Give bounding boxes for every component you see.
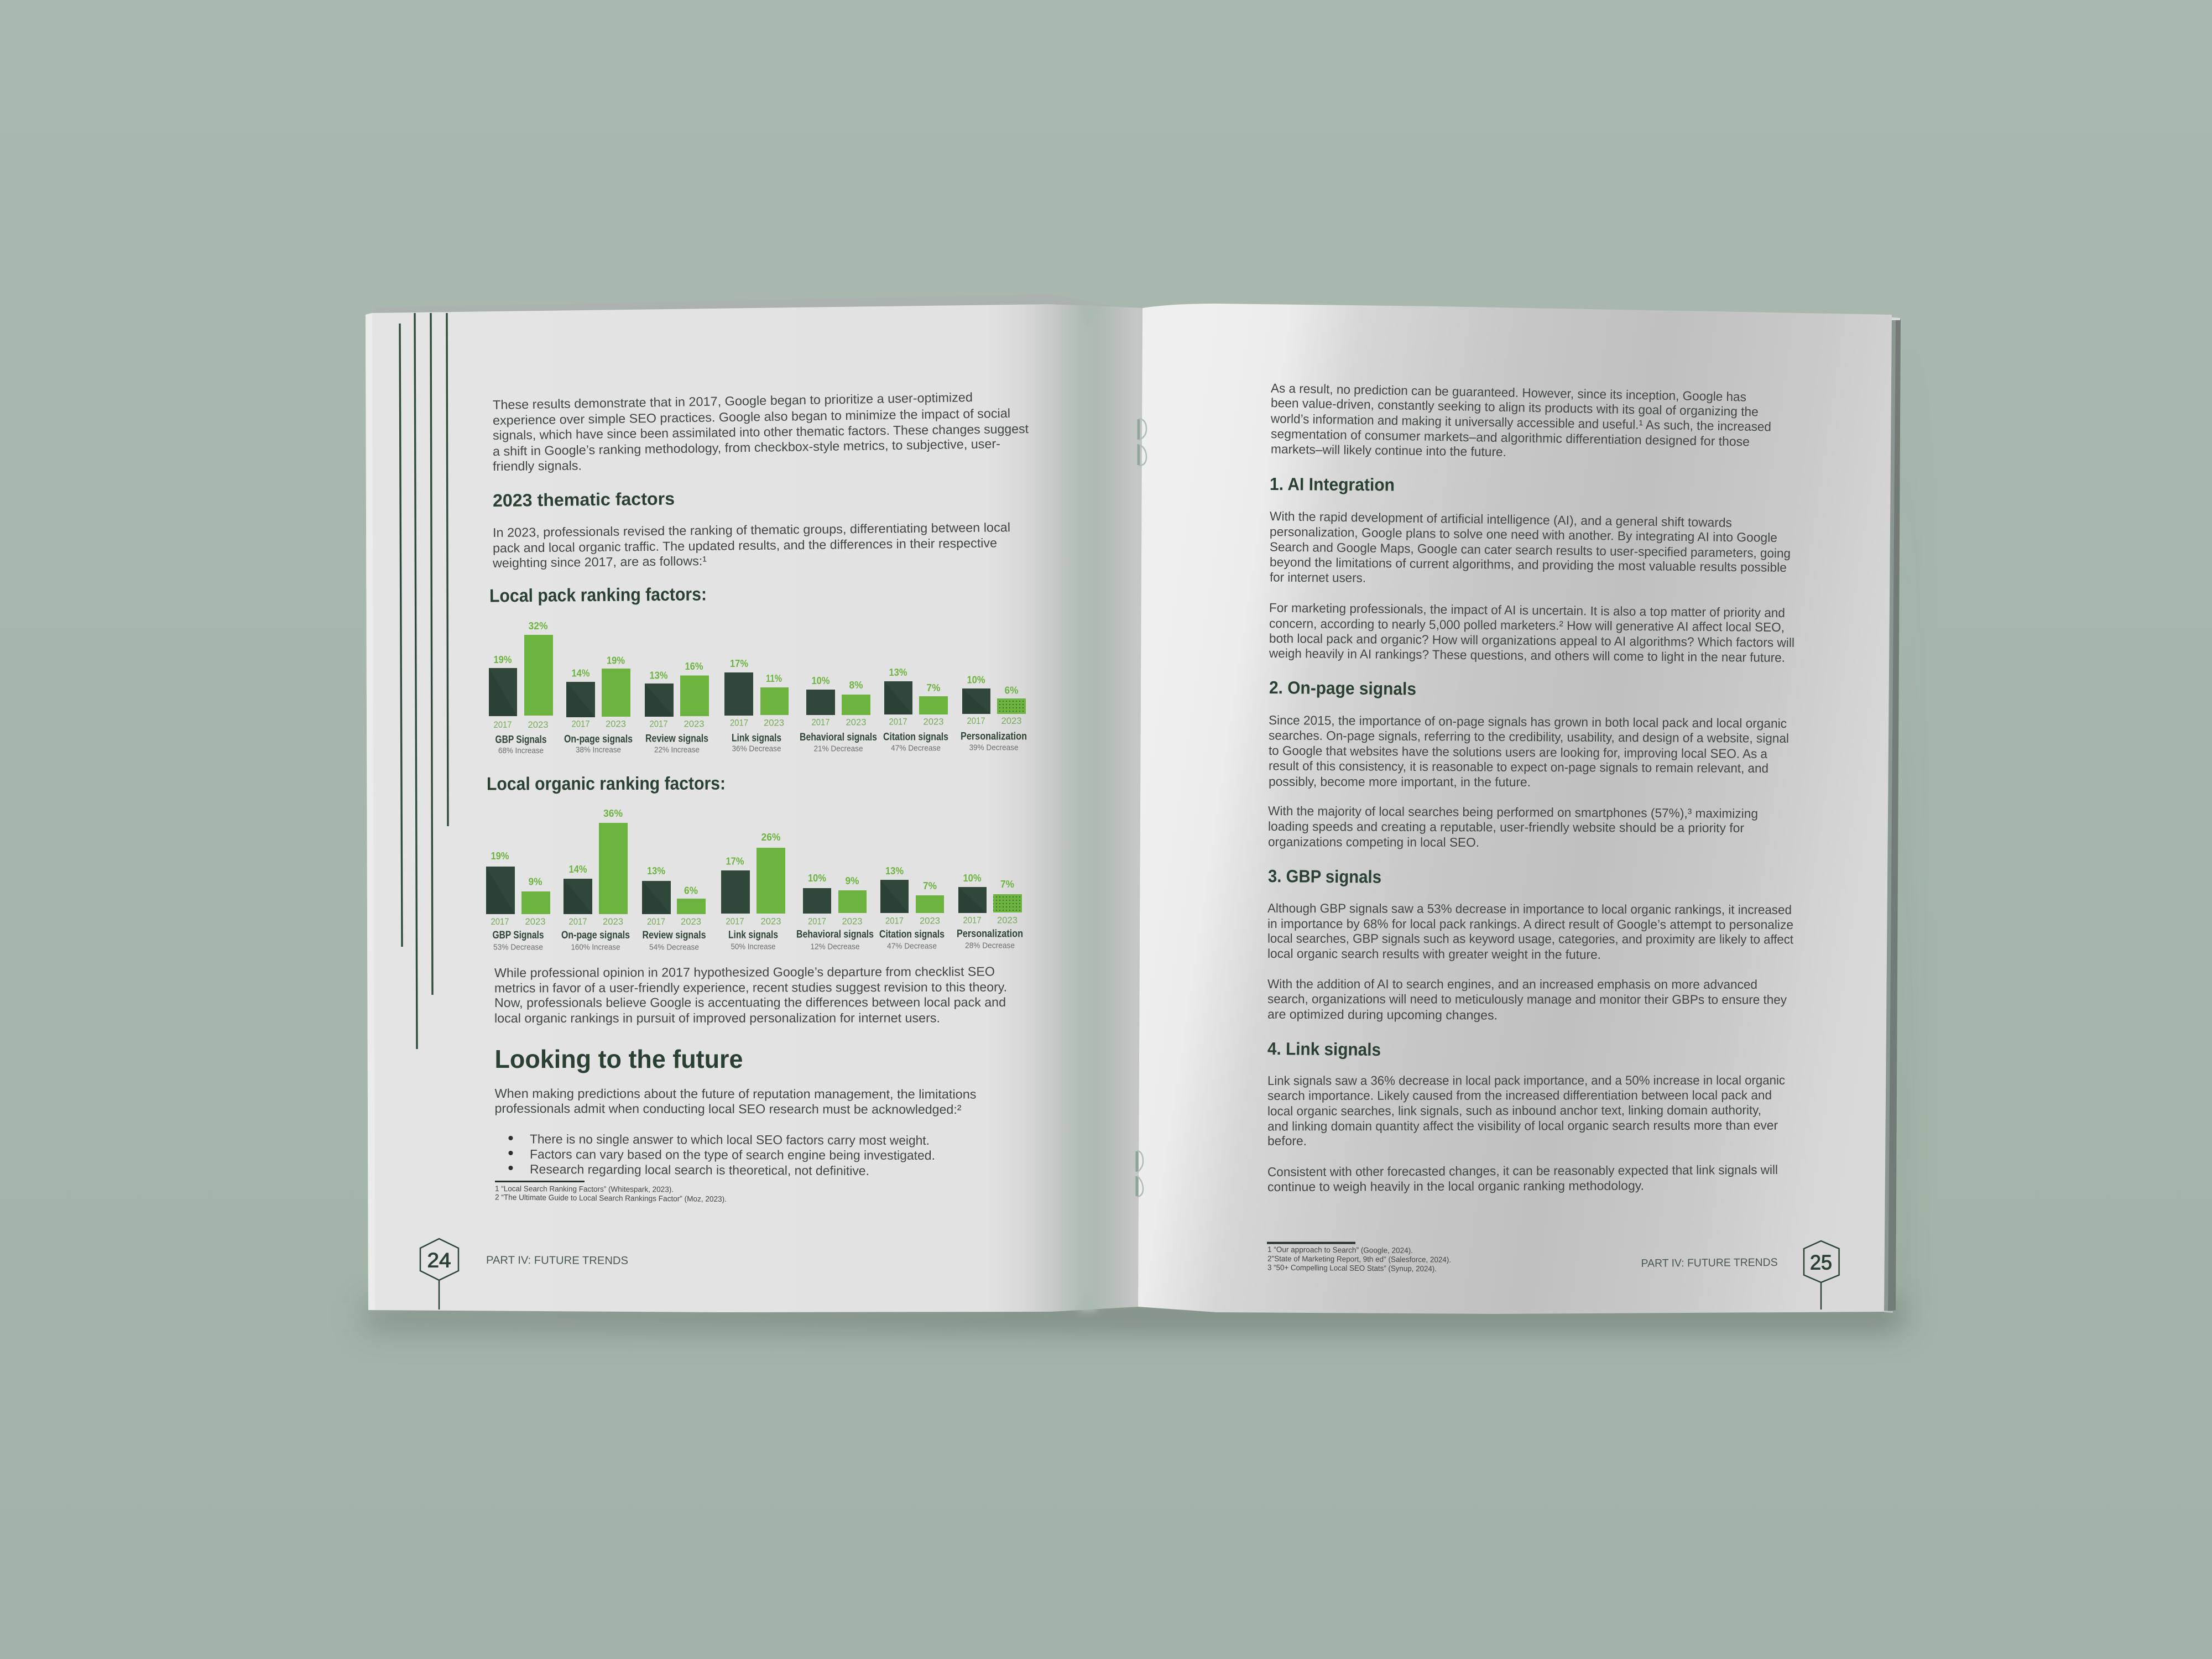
text block: AI paragraph one: for internet users. [1270,570,1366,585]
group: personalization: 28% Decrease [965,941,1015,950]
page number hexagon [1804,1241,1839,1310]
text block: link paragraph one: local organic searches, link signals, such as inbound anchor text, linking domain authority, [1267,1103,1761,1118]
running footer: PART IV: FUTURE TRENDS [1641,1256,1778,1270]
group: personalization [957,873,1023,950]
group: personalization: 10% [967,675,985,686]
text block: intro paragraph [493,390,1029,473]
group: behavioral signals [796,873,874,951]
group: personalization: 6% [1004,685,1019,696]
group: personalization: Personalization [957,928,1023,940]
group: behavioral signals: 21% Decrease [814,744,863,753]
text block: GBP paragraph one: Although GBP signals saw a 53% decrease in importance to local organic rankings, it increased [1267,901,1792,917]
group: personalization: 2023 [1001,716,1022,726]
footnotes: 3 “50+ Compelling Local SEO Stats” (Synup, 2024). [1267,1263,1437,1273]
text block: link paragraph two [1267,1162,1778,1194]
group: GBP signals: 53% Decrease [493,942,543,952]
heading: 2023 thematic factors: 2023 thematic factors [493,489,675,510]
bar chart: local pack ranking factors [489,620,1027,755]
footnotes: 2 “The Ultimate Guide to Local Search Rankings Factor” (Moz, 2023). [495,1193,727,1203]
group: review signals: Review signals [645,733,708,744]
group: citation signals: 7% [927,682,940,693]
group: link signals: 2017 [730,718,748,728]
text block: link paragraph one [1267,1073,1785,1148]
group: link signals: 11% [766,673,782,684]
group: behavioral signals [800,675,877,753]
heading: local pack ranking factors: Local pack ranking factors: [489,583,707,606]
group: review signals: 54% Decrease [649,942,699,952]
group: GBP signals: 9% [529,876,542,887]
group: review signals: 2017 [649,719,668,729]
group: citation signals [879,865,945,951]
running footer: PART IV: FUTURE TRENDS [486,1254,628,1267]
text block: GBP paragraph two [1267,977,1787,1022]
group: citation signals: Citation signals [879,929,945,940]
text block: opening paragraph: been value-driven, constantly seeking to align its products with its goal of organizing the [1271,395,1759,419]
group: personalization: 2023 [997,915,1018,926]
gutter fold highlights [1078,306,1098,1312]
group: link signals: 2023 [761,916,781,927]
group: on-page signals: 2023 [606,719,626,729]
bulleted list: There is no single answer to which local SEO factors carry most weight. [530,1132,930,1147]
group: on-page signals [564,655,633,754]
group: behavioral signals: 8% [849,680,863,691]
text block: on-page paragraph two: With the majority of local searches being performed on smartphones (57%),³ maximizing [1268,804,1758,821]
group: review signals: 2023 [684,719,705,729]
text block: conclusion paragraph: local organic rankings in pursuit of improved personalization for internet users. [494,1010,940,1025]
group: link signals: Link signals [728,929,778,941]
group: GBP signals: 2017 [493,719,512,730]
text block: on-page paragraph one [1269,713,1789,789]
text block: 2023 paragraph: In 2023, professionals revised the ranking of thematic groups, differentiating between local [493,520,1010,540]
text block: GBP paragraph one [1267,901,1794,962]
text block: GBP paragraph two: With the addition of AI to search engines, and an increased emphasis on more advanced [1267,977,1757,992]
page number hexagon: 25 [1810,1251,1832,1274]
text block: GBP paragraph one: local organic search results with greater weight in the future. [1267,946,1601,962]
group: citation signals: 2017 [889,717,907,727]
text block: GBP paragraph one: in importance by 68% for local pack rankings. A direct result of Google’s attempt to personalize [1267,916,1793,932]
text block: opening paragraph [1270,381,1771,459]
text block: GBP paragraph two: are optimized during upcoming changes. [1267,1007,1498,1022]
group: link signals [724,658,789,753]
text block: on-page paragraph one: searches. On-page signals, referring to the credibility, usability, and design of a website, signal [1269,728,1789,745]
text block: AI paragraph one: With the rapid development of artificial intelligence (AI), and a general shift towards [1270,509,1732,530]
group: link signals: 50% Increase [731,942,775,951]
text block: opening paragraph: world’s information and making it universally accessible and useful.¹ As such, the increased [1270,411,1771,434]
group: review signals: 6% [684,885,698,896]
text block: link paragraph two: continue to weigh heavily in the local organic ranking methodology. [1267,1178,1644,1194]
group: personalization: 2017 [963,915,981,926]
group: review signals: 22% Increase [654,745,700,754]
group: on-page signals: 2017 [568,916,587,927]
text block: intro paragraph: a shift in Google’s ranking methodology, from checkbox-style metrics, to subjective, user- [493,436,1000,458]
group: GBP signals: 68% Increase [498,746,544,755]
group: review signals: 13% [647,865,665,877]
group: behavioral signals: 2023 [846,717,866,728]
group: behavioral signals: 2017 [812,717,830,728]
text block: intro paragraph: signals, which have since been assimilated into other thematic factors. These changes suggest [493,421,1029,442]
group: behavioral signals: 2023 [842,916,863,927]
text block: intro paragraph: experience over simple SEO practices. Google also began to minimize the impact of social [493,406,1010,427]
text block: AI paragraph two: For marketing professionals, the impact of AI is uncertain. It is also a top matter of priority and [1269,601,1785,620]
text block: AI paragraph two: concern, according to nearly 5,000 polled marketers.² How will generative AI affect local SEO, [1269,616,1785,634]
group: link signals: 36% Decrease [732,744,781,753]
group: behavioral signals: 9% [845,875,859,886]
decorative vertical lines [400,313,448,1049]
group: behavioral signals: Behavioral signals [796,929,874,940]
bar chart: local organic ranking factors [486,808,1023,952]
text block: opening paragraph: segmentation of consumer markets–and algorithmic differentiation designed for those [1271,426,1750,449]
text block: intro paragraph: friendly signals. [493,458,582,473]
heading: link signals: 4. Link signals [1267,1039,1381,1060]
group: on-page signals: On-page signals [561,930,630,941]
text block: link paragraph one: before. [1267,1134,1307,1148]
group: on-page signals [561,808,630,952]
panel: right page [1137,304,1901,1314]
group: link signals: 26% [761,832,781,843]
group: review signals [642,865,706,952]
group: citation signals: 47% Decrease [887,941,937,951]
stack edge [1884,317,1901,1313]
heading: looking to the future: Looking to the future [494,1045,743,1073]
text block: opening paragraph: markets–will likely continue into the future. [1271,442,1506,459]
group: citation signals: 2017 [885,916,904,926]
group: behavioral signals: 10% [808,873,826,884]
group: review signals [645,661,709,754]
group: GBP signals: GBP Signals [495,734,546,745]
group: review signals: 2023 [681,916,701,927]
text block: opening paragraph: As a result, no prediction can be guaranteed. However, since its inception, Google has [1271,381,1746,404]
group: GBP signals: 2023 [525,916,545,927]
group: review signals: 2017 [647,916,665,927]
group: personalization: 39% Decrease [969,743,1019,752]
text block: GBP paragraph two: search, organizations will need to meticulously manage and monitor their GBPs to ensure they [1267,992,1787,1006]
group: on-page signals: 2017 [572,719,589,729]
group: citation signals: 2023 [924,717,943,727]
group: on-page signals: 36% [603,808,623,819]
text block: future paragraph: When making predictions about the future of reputation management, the limitations [494,1086,977,1102]
footnotes [495,1181,727,1203]
text block: conclusion paragraph: Now, professionals believe Google is accentuating the differences between local pack and [494,995,1006,1010]
group: personalization: 7% [1000,879,1014,890]
group: GBP signals: 2023 [528,719,549,730]
group: review signals: Review signals [643,930,706,941]
heading: GBP signals: 3. GBP signals [1268,866,1381,887]
group: GBP signals [486,851,550,952]
heading: local organic ranking factors: Local organic ranking factors: [487,773,726,794]
page sheet [1138,304,1892,1314]
group: on-page signals: 19% [607,655,625,666]
group: link signals: 2023 [764,718,784,728]
page number hexagon: 24 [427,1249,451,1272]
group: GBP signals: 19% [491,851,509,862]
staples [1137,419,1146,1197]
group: on-page signals: On-page signals [564,733,633,745]
footnotes: 1 “Local Search Ranking Factors” (Whitespark, 2023). [495,1184,674,1194]
group: behavioral signals: Behavioral signals [800,732,877,743]
group: on-page signals: 14% [572,668,589,679]
text block: on-page paragraph two: loading speeds and creating a reputable, user-friendly website should be a priority for [1268,819,1744,835]
bulleted list: Factors can vary based on the type of search engine being investigated. [530,1147,935,1162]
text block: AI paragraph one: personalization, Google plans to solve one need with another. By integrating AI into Google [1270,524,1777,545]
text block: 2023 paragraph: pack and local organic traffic. The updated results, and the differences in their respective [493,535,997,555]
group: GBP signals: 2017 [491,916,509,927]
text block: intro paragraph: These results demonstrate that in 2017, Google began to prioritize a user-optimized [493,390,973,412]
text block: on-page paragraph one: possibly, become more important, in the future. [1269,774,1531,789]
group: behavioral signals: 12% Decrease [811,942,859,951]
text block: on-page paragraph two: organizations competing in local SEO. [1268,834,1479,849]
book shadow [359,321,1905,1330]
group: link signals: Link signals [732,732,781,744]
group: on-page signals: 38% Increase [576,745,621,754]
group: citation signals: 13% [889,667,907,678]
text block: conclusion paragraph: metrics in favor of a user-friendly experience, recent studies suggest revision to this theory. [494,980,1007,995]
text block: GBP paragraph one: local searches, GBP signals such as keyword usage, categories, and proximity are likely to affect [1267,931,1794,946]
bulleted list [509,1132,935,1178]
group: link signals: 17% [730,658,748,669]
group: citation signals: Citation signals [883,731,948,743]
text block: AI paragraph two: both local pack and organic? How will organizations appeal to AI algorithms? Which factors will [1269,631,1794,650]
group: personalization: Personalization [961,731,1027,742]
group: citation signals [883,667,948,753]
text block: 2023 paragraph [492,520,1010,570]
group: link signals [721,832,785,951]
top page edge shadow [372,294,1112,313]
text block: on-page paragraph one: result of this consistency, it is reasonable to expect on-page signals to remain relevant, and [1269,759,1768,775]
group: GBP signals [489,620,553,755]
group: GBP signals: GBP Signals [492,930,544,941]
text block: link paragraph one: search importance. Likely caused from the increased differentiation between local pack and [1267,1088,1772,1103]
group: review signals: 16% [685,661,703,672]
group: GBP signals: 19% [493,654,512,665]
group: GBP signals: 32% [529,620,547,632]
group: review signals: 13% [649,670,668,681]
group: behavioral signals: 2017 [808,916,826,927]
footnotes [1267,1243,1451,1273]
text block: on-page paragraph one: Since 2015, the importance of on-page signals has grown in both local pack and local organic [1269,713,1787,731]
group: citation signals: 7% [923,880,937,891]
text block: AI paragraph one [1270,509,1791,585]
group: personalization: 10% [963,873,981,884]
text block: conclusion paragraph: While professional opinion in 2017 hypothesized Google’s departure from checklist SEO [494,964,995,980]
group: link signals: 17% [726,856,744,867]
group: citation signals: 13% [885,865,904,877]
group: on-page signals: 160% Increase [571,942,620,952]
text block: link paragraph two: Consistent with other forecasted changes, it can be reasonably expected that link signals will [1267,1162,1778,1179]
group: behavioral signals: 10% [812,675,830,686]
group: personalization [961,675,1027,752]
group: on-page signals: 2023 [603,916,623,927]
group: personalization: 2017 [967,716,985,726]
text block: on-page paragraph one: to Google that websites have the solutions users are looking for, improving local SEO. As a [1269,743,1767,761]
heading: on-page signals: 2. On-page signals [1269,677,1416,699]
footnotes: 1 “Our approach to Search” (Google, 2024). [1267,1245,1413,1255]
text block: AI paragraph one: Search and Google Maps, Google can cater search results to user-specified parameters, going [1270,540,1791,561]
text block: AI paragraph two: weigh heavily in AI rankings? These questions, and others will come to light in the near future. [1269,646,1785,665]
text block: AI paragraph one: beyond the limitations of current algorithms, and providing the most valuable results possible [1270,555,1787,575]
text block: AI paragraph two [1269,601,1794,665]
group: link signals: 2017 [726,916,744,927]
text block: link paragraph one: and linking domain quantity affect the visibility of local organic search results more than ever [1267,1118,1778,1133]
text block: conclusion paragraph [494,964,1007,1025]
panel: left page [366,294,1142,1312]
stacked sheet edge [366,313,375,1310]
text block: link paragraph one: Link signals saw a 36% decrease in local pack importance, and a 50% increase in local organic [1267,1073,1785,1088]
text block: 2023 paragraph: weighting since 2017, are as follows:¹ [492,554,707,570]
footnotes: 2"State of Marketing Report, 9th ed" (Salesforce, 2024). [1267,1254,1451,1264]
text block: on-page paragraph two [1268,804,1758,849]
bulleted list: Research regarding local search is theoretical, not definitive. [530,1162,869,1178]
page number hexagon [420,1239,458,1310]
text block: future paragraph: professionals admit when conducting local SEO research must be acknowledged:² [494,1101,962,1117]
group: on-page signals: 14% [568,864,587,875]
group: citation signals: 2023 [920,916,940,926]
group: citation signals: 47% Decrease [891,743,941,753]
text block: future paragraph [494,1086,977,1117]
page sheet [366,304,1142,1312]
heading: AI integration: 1. AI Integration [1270,474,1395,494]
